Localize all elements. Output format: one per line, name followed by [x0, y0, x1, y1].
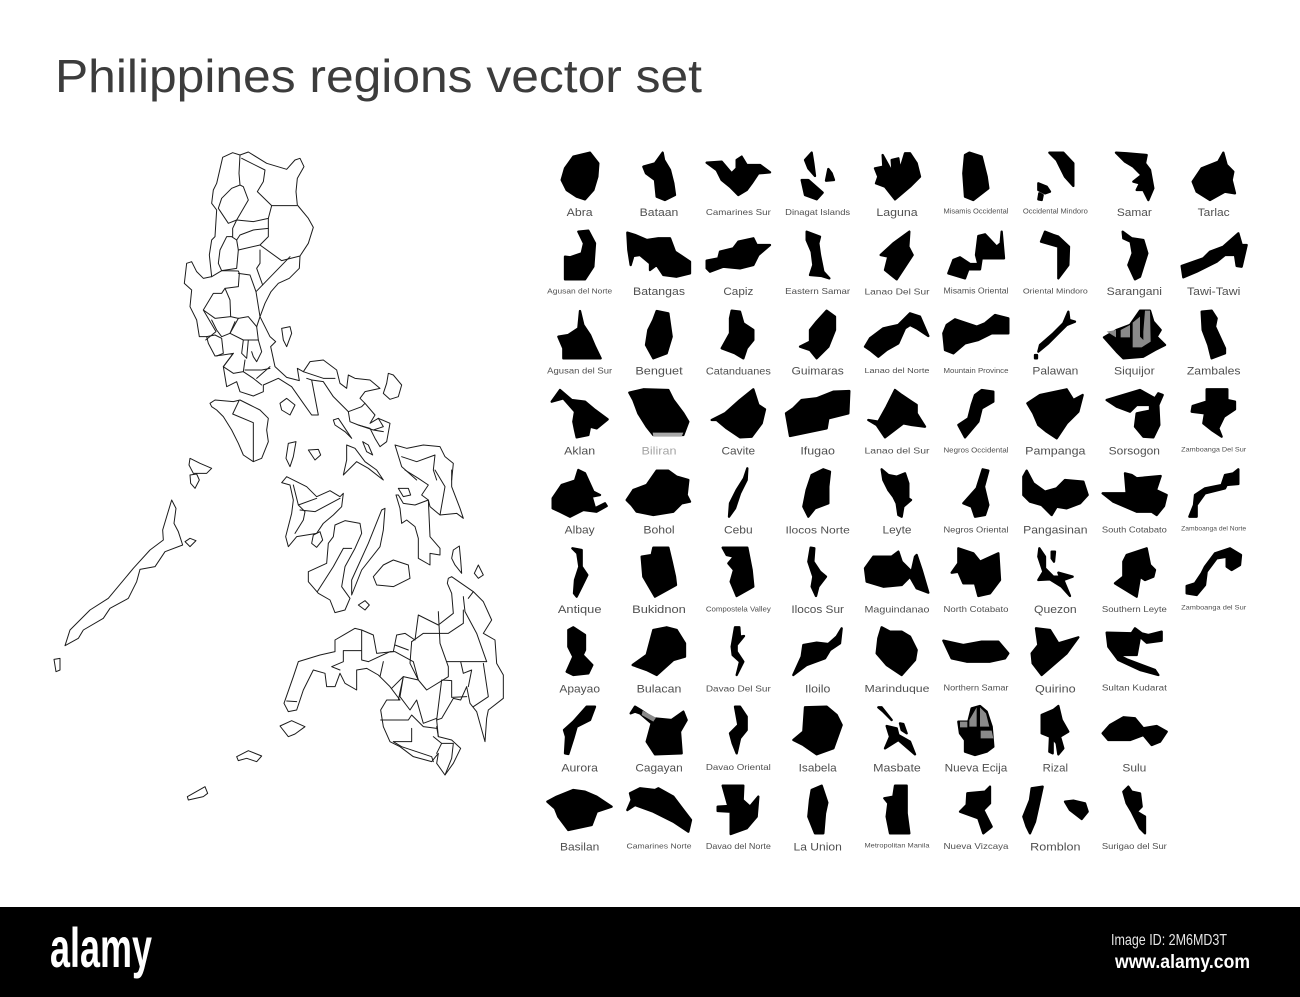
region: Pampanga: Pampanga: [1025, 445, 1086, 457]
region: Basilan: [547, 790, 612, 854]
region: Capiz: Capiz: [723, 286, 753, 298]
region: Marinduque: [864, 627, 930, 695]
region: Dinagat Islands: Dinagat Islands: [785, 207, 851, 217]
region: Mountain Province: Mountain Province: [943, 368, 1009, 375]
region: Albay: Albay: [565, 525, 595, 537]
region: Iloilo: Iloilo: [805, 683, 830, 695]
region: Northern Samar: Northern Samar: [943, 683, 1009, 693]
grid section: rows 1-3, columns 1-5: [547, 153, 930, 378]
island: Negros: [308, 521, 362, 613]
region: Cavite: Cavite: [721, 445, 755, 457]
region: South Cotabato: [1102, 473, 1167, 535]
region: Davao Del Sur: Davao Del Sur: [706, 683, 771, 693]
island: Tawi-Tawi: [187, 787, 208, 800]
region: Lanao del Sur: Lanao del Sur: [864, 445, 930, 455]
region: Cebu: Cebu: [724, 525, 753, 537]
region: Nueva Vizcaya: Nueva Vizcaya: [943, 841, 1009, 851]
region: La Union: [793, 786, 842, 854]
region: Palawan: [1032, 312, 1078, 378]
island: Camiguin: [474, 565, 483, 578]
region: Lanao del Norte: [864, 313, 930, 375]
region: Basilan: Basilan: [560, 842, 599, 854]
region: Ifugao: Ifugao: [800, 445, 835, 457]
island: Cebu: [352, 508, 385, 595]
region: Capiz: [707, 238, 770, 298]
region: North Cotabato: [943, 548, 1009, 614]
region: Tawi-Tawi: Tawi-Tawi: [1187, 286, 1240, 298]
region: Metropolitan Manila: Metropolitan Manila: [864, 843, 930, 849]
map: northern Philippines (Luzon, Mindoro, Bicol): [184, 152, 453, 480]
region: Compostela Valley: Compostela Valley: [706, 606, 771, 613]
map: Philippines provinces outline: [54, 152, 503, 800]
region: Bataan: Bataan: [640, 207, 678, 219]
region: Davao Oriental: [706, 707, 771, 772]
region: Camarines Sur: Camarines Sur: [706, 207, 771, 217]
region: Davao del Norte: Davao del Norte: [706, 841, 771, 851]
region: Misamis Oriental: Misamis Oriental: [943, 286, 1009, 296]
region: Rizal: Rizal: [1043, 762, 1068, 774]
region: Occidental Mindoro: [1023, 153, 1088, 216]
region: Batangas: Batangas: [633, 286, 686, 298]
island: Mindoro: [210, 400, 268, 462]
region: Lanao del Sur: [864, 390, 930, 455]
region: Guimaras: Guimaras: [791, 366, 844, 378]
region: Cagayan: Cagayan: [635, 762, 683, 774]
region: South Cotabato: South Cotabato: [1102, 525, 1167, 535]
region: Dinagat Islands: [785, 153, 851, 217]
region: Davao Del Sur: [706, 627, 771, 693]
region: Maguindanao: Maguindanao: [864, 604, 929, 614]
region: Agusan del Norte: [547, 231, 612, 295]
grid section: rows 1-3, columns 6-9: [943, 153, 1247, 378]
region: Benguet: Benguet: [635, 366, 683, 378]
region: Cagayan: [631, 707, 687, 774]
region: Oriental Mindoro: Oriental Mindoro: [1023, 289, 1088, 296]
region: Ilocos Sur: [791, 548, 844, 616]
region: Nueva Vizcaya: [943, 787, 1009, 851]
region: Masbate: Masbate: [873, 762, 921, 774]
region: Samar: [1116, 153, 1153, 219]
island: Polillo: [282, 327, 292, 347]
region: Leyte: [882, 469, 911, 537]
region: Northern Samar: [943, 641, 1009, 693]
island: Panay: [282, 477, 343, 547]
region: Mountain Province: [943, 315, 1009, 375]
region: Quezon: Quezon: [1034, 604, 1077, 616]
region: Biliran: [629, 389, 688, 457]
region: Zamboanga Del Sur: Zamboanga Del Sur: [1181, 447, 1246, 453]
island: Biliran: [398, 488, 411, 497]
region: Occidental Mindoro: Occidental Mindoro: [1023, 209, 1088, 216]
region: Catanduanes: [706, 311, 771, 377]
region: Rizal: [1042, 706, 1068, 774]
region: Zamboanga del Norte: [1181, 469, 1247, 532]
region: Iloilo: [793, 628, 842, 695]
region: Tawi-Tawi: [1182, 233, 1247, 298]
region: Sorsogon: Sorsogon: [1109, 445, 1160, 457]
region: Agusan del Norte: Agusan del Norte: [547, 288, 612, 295]
region: Guimaras: [791, 311, 844, 378]
region: Ilocos Sur: Ilocos Sur: [791, 604, 844, 616]
province silhouettes grid: [547, 153, 1247, 854]
region: Lanao Del Sur: [864, 232, 930, 296]
title: Philippines regions vector set: [55, 50, 702, 102]
region: Sultan Kudarat: Sultan Kudarat: [1102, 683, 1167, 693]
region: Aurora: [561, 707, 599, 774]
island: Palawan: [65, 500, 183, 646]
region: Albay: [553, 470, 607, 537]
region: Bulacan: Bulacan: [637, 683, 681, 695]
region: Bataan: [640, 153, 678, 219]
region: Sarangani: Sarangani: [1107, 286, 1162, 298]
region: Quirino: [1032, 628, 1078, 695]
region: La Union: La Union: [793, 842, 842, 854]
region: Apayao: [559, 627, 600, 695]
region: Negros Occidental: Negros Occidental: [943, 447, 1009, 454]
islands: Romblon: [286, 442, 321, 467]
region: Eastern Samar: [785, 232, 850, 296]
region: Lanao del Norte: Lanao del Norte: [864, 368, 930, 375]
region: Surigao del Sur: Surigao del Sur: [1102, 841, 1167, 851]
region: Ifugao: [786, 391, 849, 457]
region: Southern Leyte: [1102, 548, 1167, 614]
region: Abra: Abra: [567, 207, 594, 219]
region: Bulacan: [633, 627, 685, 695]
region: Sulu: [1103, 717, 1167, 774]
region: Bohol: [627, 471, 690, 537]
region: Zamboanga del Sur: [1181, 548, 1246, 612]
footer: alamy watermark band: [0, 907, 1300, 997]
grid section: rows 4-6, columns 1-5: [552, 389, 930, 616]
region: Davao Oriental: Davao Oriental: [706, 762, 771, 772]
region: Agusan del Sur: [547, 311, 612, 376]
region: Cebu: [724, 468, 753, 537]
region: Laguna: [875, 153, 920, 219]
island: Leyte: [396, 495, 440, 565]
island: Marinduque: [280, 398, 295, 415]
region: Marinduque: Marinduque: [864, 684, 930, 695]
region: Pangasinan: [1023, 471, 1088, 537]
region: Zambales: [1187, 311, 1241, 378]
islands: Masbate: [333, 418, 383, 480]
region: Negros Occidental: [943, 390, 1009, 454]
region: Biliran: Biliran: [641, 445, 676, 457]
region: Zambales: Zambales: [1187, 366, 1241, 378]
region: Surigao del Sur: [1102, 787, 1167, 851]
region: Benguet: [635, 311, 683, 378]
region: Cavite: [712, 389, 765, 457]
region: Palawan: Palawan: [1032, 366, 1078, 378]
region: Catanduanes: Catanduanes: [706, 366, 771, 377]
region: Zamboanga del Sur: Zamboanga del Sur: [1181, 606, 1246, 612]
region: Tarlac: [1193, 153, 1235, 219]
grid section: rows 7-9, columns 6-8: [943, 628, 1167, 854]
island: Siquijor: [358, 601, 369, 610]
region: Sulu: Sulu: [1122, 762, 1146, 774]
island: Dinagat: [452, 546, 462, 573]
region: Bukidnon: [632, 548, 686, 616]
island: Sulu: [237, 751, 262, 762]
region: Maguindanao: [864, 552, 929, 614]
alamy logo: alamy: [50, 916, 152, 979]
region: Isabela: [793, 707, 842, 774]
region: Negros Oriental: [943, 469, 1009, 535]
region: Aurora: Aurora: [561, 762, 599, 774]
region: Sorsogon: [1107, 390, 1163, 457]
region: Aklan: Aklan: [564, 445, 595, 457]
website: www.alamy.com: [1114, 952, 1250, 973]
region: Tarlac: Tarlac: [1198, 207, 1230, 219]
region: Sarangani: [1107, 232, 1162, 298]
island: Basilan: [280, 721, 305, 737]
region: Aklan: [552, 390, 608, 457]
region: North Cotabato: North Cotabato: [943, 604, 1009, 614]
region: Camarines Norte: [626, 788, 692, 850]
region: Zamboanga del Norte: Zamboanga del Norte: [1181, 526, 1247, 532]
region: Ilocos Norte: [785, 469, 850, 536]
region: Agusan del Sur: Agusan del Sur: [547, 366, 612, 376]
region: Antique: Antique: [558, 604, 601, 616]
region: Bohol: Bohol: [643, 525, 675, 537]
island: Samar north: [395, 445, 453, 480]
region: Batangas: [627, 233, 690, 298]
map: southern Philippines (Visayas, Palawan, Mindanao): [54, 470, 503, 800]
region: Bukidnon: Bukidnon: [632, 604, 686, 616]
region: Eastern Samar: Eastern Samar: [785, 286, 850, 296]
region: Camarines Sur: [706, 157, 771, 217]
region: Southern Leyte: Southern Leyte: [1102, 604, 1167, 614]
region: Laguna: Laguna: [876, 207, 919, 219]
region: Compostela Valley: [706, 548, 771, 613]
region: Isabela: Isabela: [799, 762, 838, 774]
image id: Image ID: 2M6MD3T: [1111, 932, 1227, 949]
island: Busuanga: [189, 458, 212, 473]
region: Romblon: Romblon: [1030, 842, 1080, 854]
region: Leyte: Leyte: [882, 525, 911, 537]
region: Metropolitan Manila: [864, 786, 930, 849]
region: Oriental Mindoro: [1023, 232, 1088, 296]
region: Nueva Ecija: Nueva Ecija: [945, 762, 1008, 774]
region: Siquijor: Siquijor: [1114, 366, 1155, 378]
region: Romblon: [1023, 787, 1088, 854]
island: Bohol: [373, 560, 410, 587]
island: Guimaras: [312, 532, 323, 547]
region: Samar: Samar: [1117, 207, 1152, 219]
grid section: rows 7-9, columns 1-5: [547, 627, 930, 854]
region: Pampanga: [1025, 389, 1086, 457]
region: Quirino: Quirino: [1035, 683, 1076, 695]
region: Lanao Del Sur: Lanao Del Sur: [864, 286, 930, 296]
region: Quezon: [1034, 548, 1077, 616]
grid section: rows 4-6, columns 6-9: [943, 389, 1247, 616]
region: Sultan Kudarat: [1102, 628, 1167, 693]
region: Camarines Norte: Camarines Norte: [626, 843, 692, 850]
region: Abra: [562, 153, 598, 219]
region: Nueva Ecija: [945, 706, 1008, 774]
region: Masbate: [873, 707, 921, 774]
region: Pangasinan: Pangasinan: [1023, 525, 1087, 537]
region: Davao del Norte: [706, 786, 771, 851]
region: Misamis Occidental: [943, 153, 1009, 216]
region: Zamboanga Del Sur: [1181, 389, 1246, 453]
region: Ilocos Norte: Ilocos Norte: [785, 525, 850, 536]
region: Antique: [558, 548, 601, 616]
region: Misamis Occidental: Misamis Occidental: [943, 209, 1009, 216]
island: Catanduanes: [383, 373, 402, 399]
region: Negros Oriental: Negros Oriental: [943, 525, 1009, 535]
island: Mindanao: [284, 577, 503, 775]
region: Misamis Oriental: [943, 232, 1009, 296]
region: Apayao: Apayao: [559, 683, 600, 695]
region: Siquijor: [1104, 311, 1165, 378]
